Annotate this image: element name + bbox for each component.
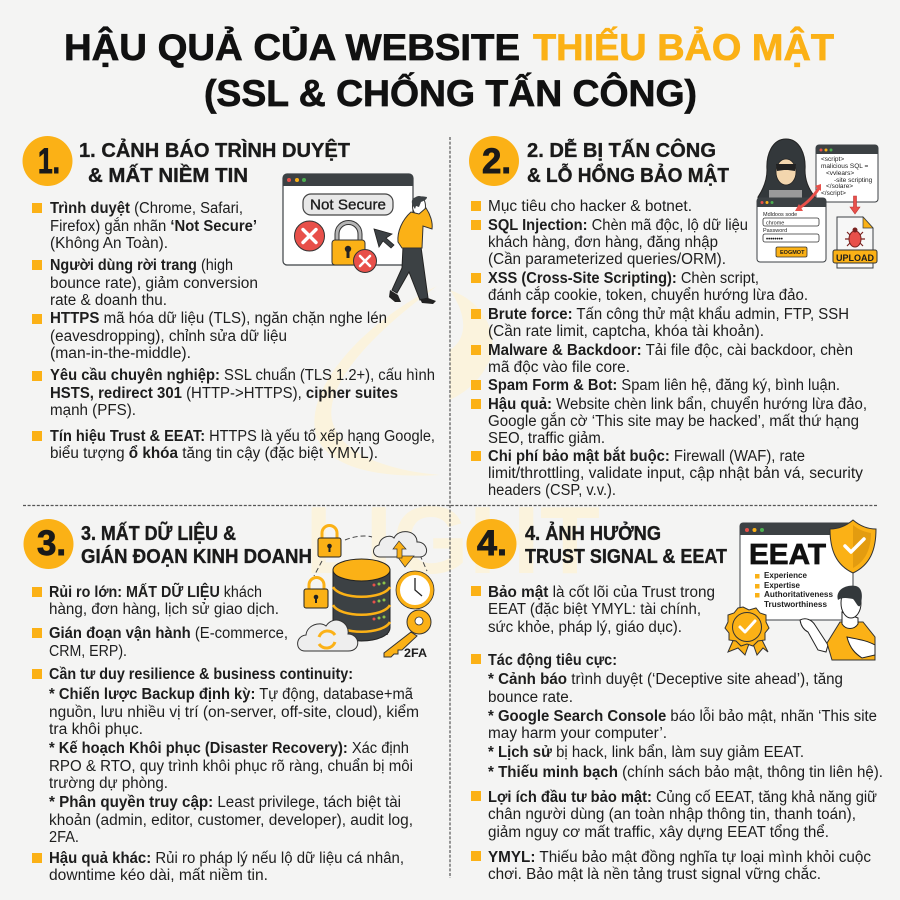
- illustration: hacker, code window, login form and malware upload: Mdldoos sode: [763, 212, 797, 218]
- list: attack bullets: SQL Injection: Chèn mã độc, lộ dữ liệu: [488, 217, 748, 234]
- list: trust signal bullets: bounce rate.: [488, 689, 573, 706]
- title: THIẾU BẢO MẬT: [533, 26, 834, 68]
- list: data loss bullets: nguồn, lưu nhiều vị trí (on-server, off-site, cloud), kiểm: [49, 704, 419, 721]
- illustration: hacker, code window, login form and malware upload: </script>: [821, 190, 846, 197]
- list: browser warning bullets: Tín hiệu Trust & EEAT: HTTPS là yếu tố xếp hạng Google,: [50, 428, 435, 445]
- list: attack bullets: khách hàng, đơn hàng, đăng nhập: [488, 234, 718, 251]
- heading 3: GIÁN ĐOẠN KINH DOANH: [81, 545, 312, 568]
- list: attack bullets: (Cần rate limit, captcha, khóa tài khoản).: [488, 323, 764, 340]
- list: trust signal bullets: * Lịch sử bị hack, link bẩn, làm suy giảm EEAT.: [488, 744, 804, 761]
- list: data loss bullets: downtime kéo dài, mất niềm tin.: [49, 867, 268, 884]
- list: attack bullets: (Cần parameterized queries/ORM).: [488, 251, 726, 268]
- list: data loss bullets: * Phân quyền truy cập: Least privilege, tách biệt tài: [49, 794, 401, 811]
- list: attack bullets: [471, 198, 867, 499]
- list: browser warning bullets: mạnh (PFS).: [50, 402, 136, 419]
- list: browser warning bullets: (man-in-the-middle).: [50, 345, 191, 362]
- list: attack bullets: Google gắn cờ ‘This site may be hacked’, mất thứ hạng: [488, 413, 859, 430]
- list: attack bullets: Hậu quả: Website chèn link bẩn, chuyển hướng lừa đảo,: [488, 396, 867, 413]
- list: trust signal bullets: Lợi ích đầu tư bảo mật: Củng cố EEAT, tăng khả năng giữ: [488, 789, 877, 806]
- heading 2: & LỖ HỔNG BẢO MẬT: [527, 163, 729, 187]
- list: data loss bullets: 2FA.: [49, 829, 79, 846]
- list: trust signal bullets: Tác động tiêu cực:: [488, 652, 617, 669]
- illustration: hacker, code window, login form and malware upload: </solare>: [826, 183, 853, 190]
- list: attack bullets: SEO, traffic giảm.: [488, 430, 605, 447]
- number badge 1: 1.: [38, 142, 60, 181]
- list: attack bullets: Brute force: Tấn công thử mật khẩu admin, FTP, SSH: [488, 306, 849, 323]
- number badge 1: [22, 136, 72, 186]
- list: browser warning bullets: HTTPS mã hóa dữ liệu (TLS), ngăn chặn nghe lén: [50, 310, 387, 327]
- list: trust signal bullets: * Google Search Console báo lỗi bảo mật, nhãn ‘This site: [488, 708, 877, 725]
- illustration: hacker, code window, login form and malware upload: <vvlears>: [826, 170, 854, 177]
- list: trust signal bullets: chân người dùng (an toàn nhập thông tin, thanh toán),: [488, 806, 856, 823]
- heading 1: [79, 138, 350, 187]
- list: data loss bullets: tra khôi phục.: [49, 721, 143, 738]
- list: data loss bullets: * Kế hoạch Khôi phục (Disaster Recovery): Xác định: [49, 740, 409, 757]
- illustration: hacker, code window, login form and malware upload: <script>: [821, 156, 844, 163]
- heading 4: [525, 521, 727, 568]
- list: trust signal bullets: * Cảnh báo trình duyệt (‘Deceptive site ahead’), tăng: [488, 671, 843, 688]
- illustration: EEAT window, shield, badge and person: EEAT: [749, 539, 826, 571]
- list: trust signal bullets: chơi. Bảo mật là nền tảng trust signal vững chắc.: [488, 866, 821, 883]
- list: data loss bullets: Gián đoạn vận hành (E-commerce,: [49, 625, 288, 642]
- panel: trust signal and EEAT: [466, 519, 883, 883]
- list: browser warning bullets: rate & doanh thu.: [50, 292, 167, 309]
- number badge 3: [24, 519, 74, 569]
- illustration: hacker, code window, login form and malware upload: EOGMOT: [780, 250, 805, 256]
- list: attack bullets: Mục tiêu cho hacker & botnet.: [488, 198, 692, 215]
- list: trust signal bullets: sức khỏe, pháp lý, giáo dục).: [488, 619, 682, 636]
- illustration: EEAT window, shield, badge and person: Expertise: [764, 581, 801, 590]
- list: browser warning bullets: (Không An Toàn).: [50, 235, 168, 252]
- number badge 4: [466, 519, 516, 569]
- list: trust signal bullets: [471, 584, 883, 883]
- heading 3: 3. MẤT DỮ LIỆU &: [81, 521, 236, 545]
- illustration: EEAT window, shield, badge and person: Trustworthiness: [764, 600, 828, 609]
- illustration: hacker, code window, login form and malware upload: -site scripting: [834, 177, 873, 184]
- list: browser warning bullets: Trình duyệt (Chrome, Safari,: [50, 200, 243, 217]
- heading 1: 1. CẢNH BÁO TRÌNH DUYỆT: [79, 138, 350, 162]
- list: data loss bullets: CRM, ERP).: [49, 643, 127, 660]
- list: browser warning bullets: Yêu cầu chuyên nghiệp: SSL chuẩn (TLS 1.2+), cấu hình: [50, 367, 435, 384]
- heading 2: 2. DỄ BỊ TẤN CÔNG: [527, 138, 716, 162]
- illustration: database, locks, clouds, clock and 2FA key: 2FA: [404, 648, 427, 660]
- title: HẬU QUẢ CỦA WEBSITE: [64, 26, 520, 68]
- list: data loss bullets: Rủi ro lớn: MẤT DỮ LIỆU khách: [49, 583, 262, 601]
- list: data loss bullets: [32, 583, 419, 884]
- panel: data loss: [24, 519, 434, 884]
- heading 1: & MẤT NIỀM TIN: [88, 164, 248, 187]
- list: data loss bullets: Hậu quả khác: Rủi ro pháp lý nếu lộ dữ liệu cá nhân,: [49, 850, 404, 867]
- list: data loss bullets: * Chiến lược Backup định kỳ: Tự động, database+mã: [49, 686, 413, 703]
- list: trust signal bullets: * Thiếu minh bạch (chính sách bảo mật, thông tin liên hệ).: [488, 764, 883, 781]
- panel: browser warning: [22, 136, 436, 462]
- number badge 3: 3.: [37, 524, 66, 563]
- illustration: hacker, code window, login form and malware upload: chrome: [766, 220, 784, 226]
- list: browser warning bullets: (eavesdropping), chỉnh sửa dữ liệu: [50, 328, 287, 345]
- list: data loss bullets: trường dự phòng.: [49, 775, 168, 792]
- number badge 2: [469, 136, 519, 186]
- list: attack bullets: headers (CSP, v.v.).: [488, 482, 616, 499]
- list: data loss bullets: hàng, đơn hàng, lịch sử giao dịch.: [49, 601, 279, 618]
- title: (SSL & CHỐNG TẤN CÔNG): [204, 72, 697, 114]
- heading 2: [527, 138, 729, 187]
- panel: attacks and vulnerabilities: [469, 136, 878, 499]
- illustration: EEAT window, shield, badge and person: Experience: [764, 571, 808, 580]
- number badge 2: 2.: [482, 142, 511, 181]
- list: attack bullets: mã độc vào file core.: [488, 359, 630, 376]
- list: attack bullets: Chi phí bảo mật bắt buộc: Firewall (WAF), rate: [488, 447, 805, 465]
- illustration: not secure browser and walking person: [283, 174, 436, 304]
- illustration: EEAT window, shield, badge and person: [725, 520, 876, 660]
- illustration: hacker, code window, login form and malware upload: malicious SQL =: [821, 163, 868, 170]
- list: trust signal bullets: Bảo mật là cốt lõi của Trust trong: [488, 584, 715, 601]
- illustration: hacker, code window, login form and malware upload: Password: [763, 228, 787, 234]
- heading 3: [81, 521, 312, 568]
- list: browser warning bullets: [32, 200, 435, 462]
- list: trust signal bullets: EEAT (đặc biệt YMYL: tài chính,: [488, 601, 701, 618]
- list: attack bullets: Malware & Backdoor: Tải file độc, cài backdoor, chèn: [488, 342, 853, 359]
- list: trust signal bullets: giảm nguy cơ mất traffic, xây dựng EEAT tổng thể.: [488, 824, 829, 841]
- illustration: hacker, code window, login form and malware upload: [757, 139, 878, 268]
- heading 4: 4. ẢNH HƯỞNG: [525, 521, 661, 545]
- illustration: database, locks, clouds, clock and 2FA key: [298, 526, 434, 660]
- illustration: not secure browser and walking person: Not Secure: [310, 196, 386, 214]
- list: trust signal bullets: YMYL: Thiếu bảo mật đồng nghĩa tự loại mình khỏi cuộc: [488, 849, 871, 866]
- list: browser warning bullets: Firefox) gắn nhãn ‘Not Secure’: [50, 218, 257, 235]
- list: attack bullets: đánh cắp cookie, token, chuyển hướng lừa đảo.: [488, 287, 808, 304]
- heading 4: TRUST SIGNAL & EEAT: [525, 546, 727, 568]
- list: browser warning bullets: HSTS, redirect 301 (HTTP->HTTPS), cipher suites: [50, 385, 398, 402]
- list: data loss bullets: khoản (admin, editor, customer, developer), audit log,: [49, 812, 413, 829]
- list: browser warning bullets: bounce rate), giảm conversion: [50, 275, 258, 292]
- illustration: hacker, code window, login form and malware upload: ••••••••: [766, 236, 783, 242]
- text: LIGHT: [305, 487, 600, 594]
- list: data loss bullets: Cần tư duy resilience & business continuity:: [49, 666, 353, 683]
- number badge 4: 4.: [477, 524, 507, 563]
- list: attack bullets: Spam Form & Bot: Spam liên hệ, đăng ký, bình luận.: [488, 377, 840, 394]
- list: trust signal bullets: may harm your computer’.: [488, 725, 667, 742]
- list: attack bullets: XSS (Cross-Site Scripting): Chèn script,: [488, 270, 759, 287]
- illustration: hacker, code window, login form and malware upload: UPLOAD: [836, 253, 874, 264]
- title: [64, 26, 834, 114]
- list: browser warning bullets: Người dùng rời trang (high: [50, 257, 233, 274]
- illustration: EEAT window, shield, badge and person: Authoritativeness: [764, 590, 834, 599]
- list: browser warning bullets: biểu tượng ổ khóa tăng tin cậy (đặc biệt YMYL).: [50, 445, 378, 462]
- list: attack bullets: limit/throttling, validate input, cập nhật bản vá, security: [488, 465, 863, 482]
- list: data loss bullets: RPO & RTO, quy trình khôi phục rõ ràng, chuẩn bị môi: [49, 758, 413, 775]
